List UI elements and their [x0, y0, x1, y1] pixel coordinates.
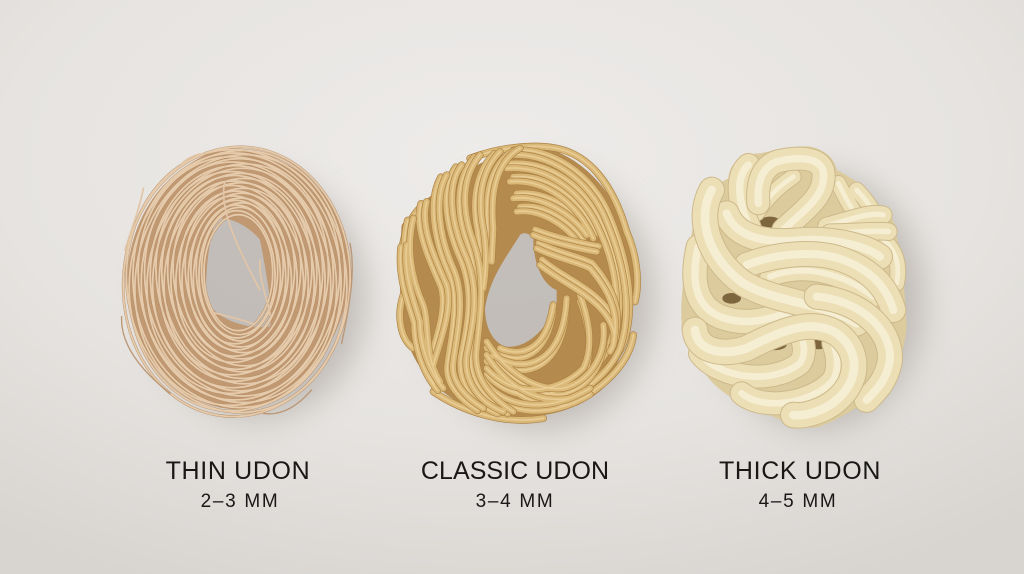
- noodle nest: classic udon: [400, 145, 637, 420]
- noodle nest: thick udon: [681, 146, 907, 428]
- label: thick udon: THICK UDON: [719, 457, 881, 485]
- label: thick udon: [719, 457, 881, 512]
- label: classic udon: [421, 457, 609, 512]
- label: classic udon: 3–4 MM: [476, 491, 554, 512]
- panel: classic udon: [400, 145, 637, 420]
- noodle nest: thin udon: [112, 136, 361, 426]
- panel: thick udon: [681, 146, 907, 428]
- dark gaps between noodles: [722, 217, 828, 350]
- panel: thin udon: [112, 136, 361, 426]
- noodle shadows: [150, 168, 924, 428]
- label: thin udon: THIN UDON: [166, 457, 310, 485]
- label: thick udon: 4–5 MM: [759, 491, 837, 512]
- label: thin udon: [166, 457, 310, 512]
- label: thin udon: 2–3 MM: [201, 491, 279, 512]
- label: classic udon: CLASSIC UDON: [421, 457, 609, 485]
